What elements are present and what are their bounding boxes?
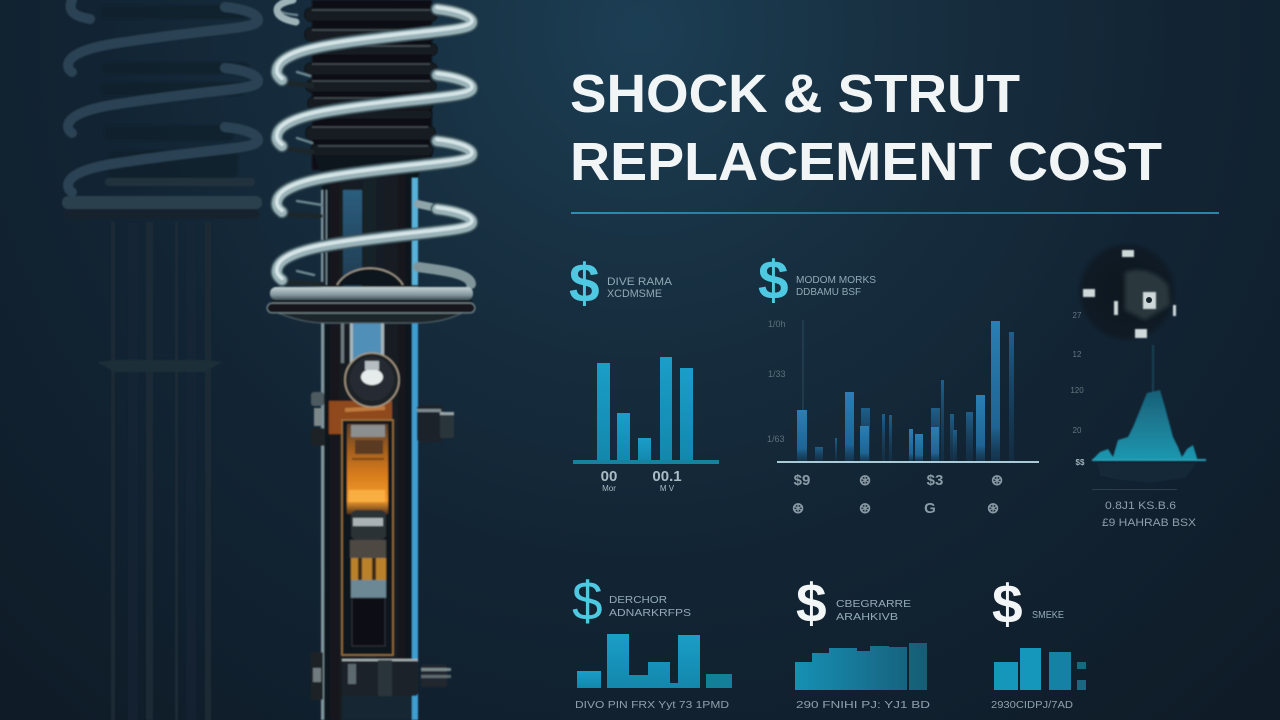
dome graphic	[1076, 241, 1178, 343]
panel: bottom left chart	[572, 570, 732, 711]
panel label: DDBAMU BSF	[796, 286, 861, 298]
bars	[597, 357, 693, 462]
x axis labels: $9	[794, 472, 810, 489]
ball joint	[345, 353, 399, 407]
y axis labels: 27	[1073, 311, 1082, 320]
panel label: SMEKE	[1032, 609, 1064, 621]
spring coil	[277, 0, 472, 284]
bars	[994, 648, 1086, 690]
axis labels: 2930CIDPJ/7AD	[991, 699, 1073, 711]
panel: top left bar chart	[569, 252, 719, 493]
panel label	[609, 594, 691, 619]
icon: cyan dollar: $	[572, 570, 603, 632]
x axis labels: G	[924, 500, 936, 517]
panel label: CBEGRARRE	[836, 598, 911, 610]
title	[570, 64, 1162, 192]
y axis labels: $$	[1076, 458, 1085, 467]
strut body	[321, 172, 418, 720]
panel: bottom right chart	[991, 573, 1086, 711]
caption	[1102, 500, 1197, 529]
axis labels: 290 FNIHI PJ: YJ1 BD	[796, 699, 931, 711]
panel label: XCDMSME	[607, 288, 662, 300]
y axis labels: 12	[1073, 350, 1082, 359]
x axis labels: $3	[927, 472, 943, 489]
icon: white dollar: $	[796, 572, 827, 634]
left bracket upper	[311, 392, 325, 446]
bars	[797, 321, 1014, 462]
axis labels	[601, 468, 682, 493]
x axis labels: ⊛	[859, 500, 871, 517]
caption: £9 HAHRAB BSX	[1102, 517, 1197, 529]
lower rod and blue stripes	[321, 313, 418, 720]
title: REPLACEMENT COST	[570, 132, 1162, 192]
axis labels: M V	[660, 484, 675, 493]
panel label: ADNARKRFPS	[609, 607, 691, 619]
lower collar	[311, 652, 451, 720]
y axis labels: 120	[1070, 386, 1084, 395]
bellows	[305, 0, 437, 176]
x axis labels: ⊛	[991, 472, 1003, 489]
icon: white dollar: $	[992, 573, 1023, 635]
y axis labels	[767, 319, 786, 444]
spring seat plate	[267, 287, 475, 323]
panel label: ARAHKIVB	[836, 611, 898, 623]
orange glowing window	[329, 401, 393, 655]
y axis labels	[1070, 311, 1085, 467]
y axis labels: 1/0h	[768, 319, 786, 329]
right bracket upper	[417, 405, 454, 442]
axis labels: Mor	[602, 484, 616, 493]
bars	[577, 634, 732, 688]
icon: cyan dollar: $	[569, 252, 600, 314]
panel label: DERCHOR	[609, 594, 667, 606]
title: SHOCK & STRUT	[570, 64, 1020, 124]
x axis labels: ⊛	[859, 472, 871, 489]
panel label	[607, 276, 673, 300]
panel label	[836, 598, 911, 623]
caption: 0.8J1 KS.B.6	[1105, 500, 1176, 512]
x axis labels	[792, 472, 1003, 517]
panel label: MODOM MORKS	[796, 274, 876, 286]
y axis labels: 20	[1073, 426, 1082, 435]
x axis labels: ⊛	[987, 500, 999, 517]
icon: cyan dollar: $	[758, 249, 789, 311]
ghost shock absorber illustration	[62, 0, 262, 720]
axis labels: 00	[601, 468, 617, 485]
panel label	[796, 274, 876, 298]
main shock absorber illustration	[267, 0, 475, 720]
stepped bars	[795, 643, 927, 690]
panel: middle bar chart	[758, 249, 1039, 517]
y axis labels: 1/63	[767, 434, 785, 444]
x axis labels: ⊛	[792, 500, 804, 517]
panel label: DIVE RAMA	[607, 276, 673, 288]
area shape	[1092, 345, 1206, 483]
panel: right area chart	[1070, 241, 1206, 529]
panel: bottom middle chart	[795, 572, 931, 711]
axis labels: 00.1	[652, 468, 682, 485]
divider line	[571, 212, 1219, 214]
y axis labels: 1/33	[768, 369, 786, 379]
axis labels: DIVO PIN FRX Yyt 73 1PMD	[575, 699, 729, 711]
